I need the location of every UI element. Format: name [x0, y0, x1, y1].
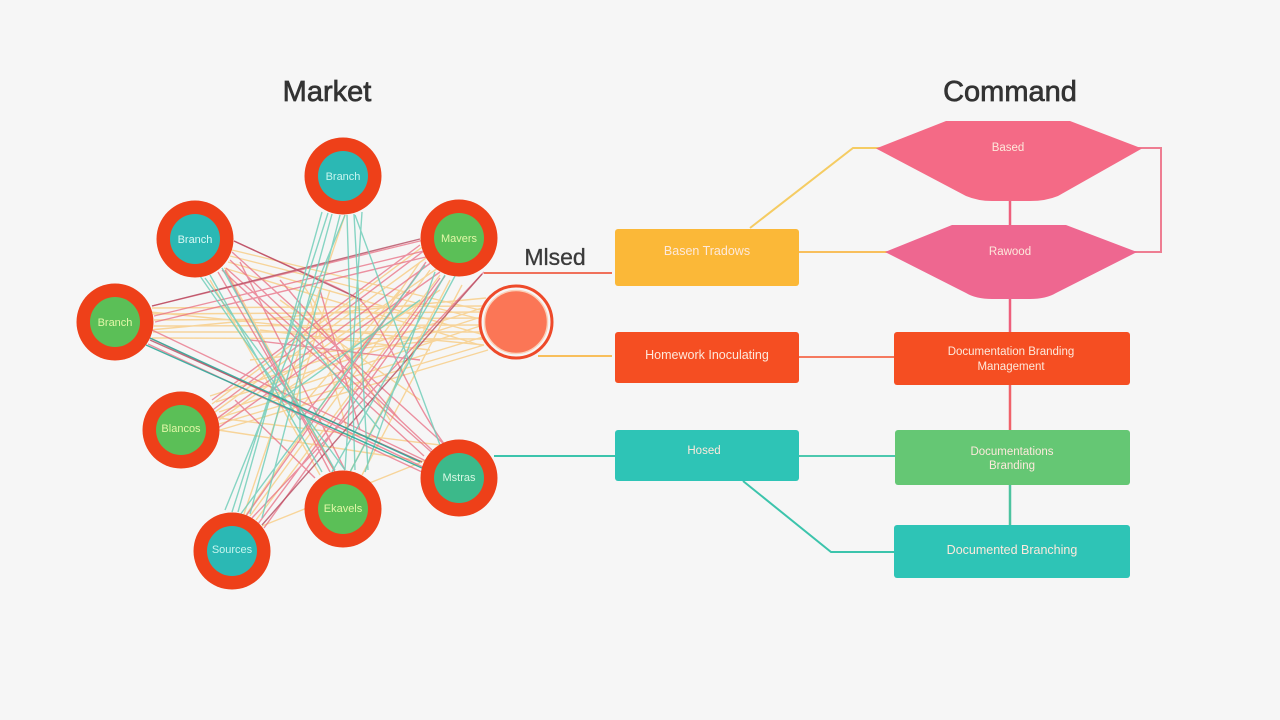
title: Market: Market	[283, 76, 371, 108]
connector: red box to red box	[799, 356, 895, 358]
node: bottom left	[194, 512, 270, 590]
node: mixed hub circle	[480, 286, 552, 358]
node: lower right	[420, 440, 498, 516]
node: upper left	[156, 200, 234, 278]
node: left	[76, 284, 154, 360]
diamond: upper	[876, 121, 1142, 201]
box: red right	[894, 332, 1130, 385]
box: red left	[615, 332, 799, 383]
connector: teal box to lower teal box	[743, 481, 895, 552]
node: upper right: Mavers	[441, 233, 478, 245]
box: teal right	[894, 525, 1130, 578]
node: upper right	[420, 200, 498, 276]
diamond: lower: Rawood	[989, 246, 1031, 258]
node: bottom	[304, 470, 382, 548]
network connection lines	[146, 212, 488, 528]
box: red right: Management	[977, 361, 1045, 373]
connector: yellow box to lower diamond	[799, 251, 888, 253]
diamond: upper: Based	[992, 142, 1024, 154]
node: top	[304, 138, 382, 214]
box: teal left: Hosed	[687, 445, 721, 457]
title: Command: Command	[943, 76, 1077, 108]
box: red right: Documentation Branding	[948, 346, 1074, 358]
node: bottom left: Sources	[212, 544, 253, 556]
diamond: lower	[885, 225, 1137, 299]
node: lower left: Blancos	[161, 423, 201, 435]
connector: node to yellow box	[484, 272, 612, 274]
node: bottom: Ekavels	[324, 503, 363, 515]
box: teal right: Documented Branching	[947, 543, 1077, 557]
box: green: Branding	[989, 460, 1035, 472]
connector: teal node to teal box	[494, 455, 616, 457]
connector: red box to green box	[1009, 384, 1011, 430]
label: Mixed: Mlsed	[524, 244, 586, 270]
connector: diamonds to red box	[1009, 198, 1011, 332]
box: green	[895, 430, 1130, 485]
connector: mixed circle to red box	[538, 355, 612, 357]
box: yellow: Basen Tradows	[664, 244, 750, 258]
node: upper left: Branch	[178, 234, 212, 246]
box: teal left	[615, 430, 799, 481]
connector: teal box to green box	[799, 455, 895, 457]
node: lower right: Mstras	[442, 472, 476, 484]
connector: yellow box to upper diamond	[750, 148, 880, 228]
node: lower left	[142, 392, 220, 468]
box: yellow	[615, 229, 799, 286]
node: top: Branch	[326, 171, 360, 183]
connector: green box to teal box	[1009, 484, 1011, 526]
connector: diamond right loop	[1134, 148, 1161, 252]
box: red left: Homework Inoculating	[645, 348, 769, 362]
box: green: Documentations	[970, 446, 1054, 458]
node: left: Branch	[98, 317, 132, 329]
